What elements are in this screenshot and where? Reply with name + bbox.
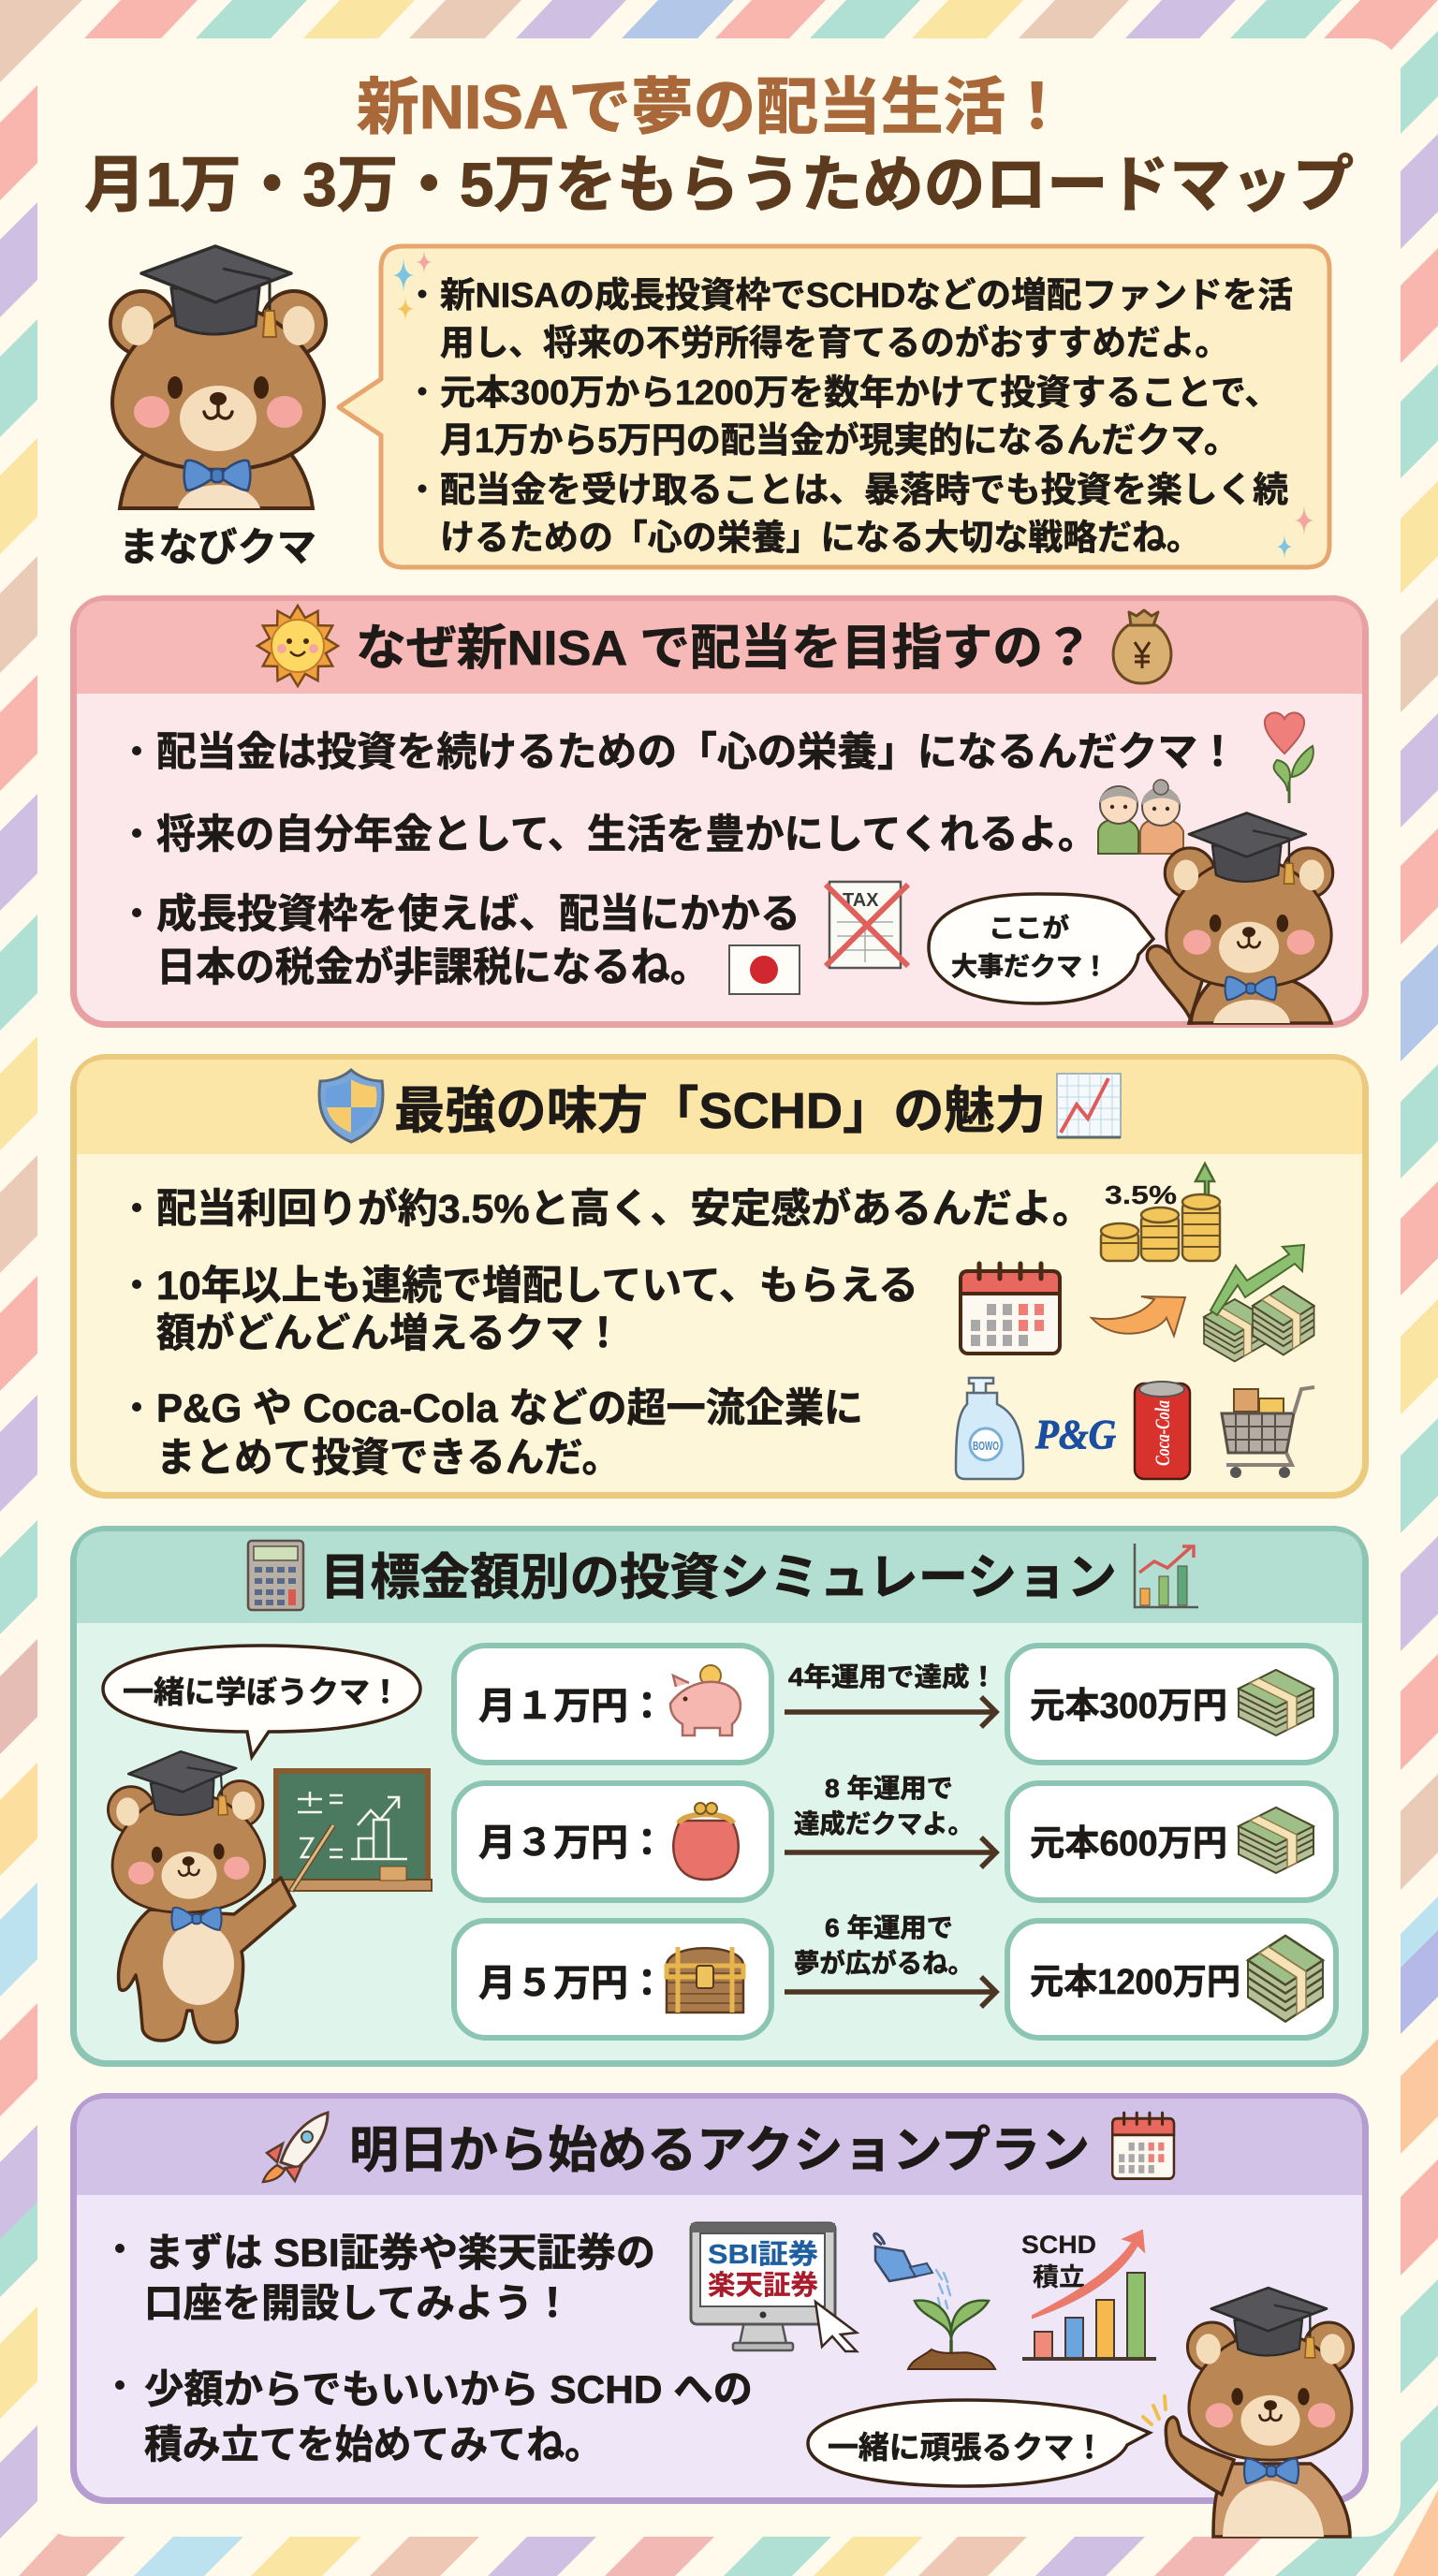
icon: coins with 3.5%	[1101, 1164, 1220, 1261]
icon: monitor with brokers: SBI証券	[708, 2239, 818, 2270]
bullet list	[132, 1187, 1093, 1481]
panel heading: なぜ新NISA で配当を目指すの？	[356, 622, 1093, 676]
icon: coin purse	[673, 1803, 739, 1880]
intro bullet list: 新NISAの成長投資枠でSCHDなどの増配ファンドを活	[440, 275, 1293, 315]
arrow with label: 4 years: 4年運用で達成！	[788, 1662, 997, 1691]
icon: treasure chest	[667, 1947, 743, 2012]
icon: money bag	[1113, 610, 1171, 683]
intro speech bubble	[339, 246, 1329, 567]
result: 3 million yen	[1007, 1646, 1336, 1763]
bullet list: 口座を開設してみよう！	[144, 2281, 572, 2325]
speech bubble	[103, 1646, 420, 1757]
icon: shield	[319, 1070, 383, 1142]
icon: cash stack	[1239, 1808, 1313, 1873]
result: 6 million yen: 元本600万円	[1030, 1824, 1227, 1864]
icon: crossed-out tax form: TAX	[843, 890, 879, 911]
panel header band	[77, 1531, 1362, 1623]
icon: cash stack	[1239, 1670, 1313, 1735]
intro bullet list	[418, 275, 1293, 557]
icon: bar and line chart	[1135, 1544, 1198, 1607]
row: 1 man yen	[454, 1646, 771, 1763]
bullet list: 積み立てを始めてみてね。	[144, 2422, 603, 2466]
icon: piggy bank	[670, 1665, 741, 1735]
intro bullet list: 月1万から5万円の配当金が現実的になるんだクマ。	[440, 420, 1239, 460]
icon: calendar	[961, 1264, 1060, 1354]
brand: P&G: P&G	[1034, 1412, 1116, 1457]
row: 3 man yen: 月３万円：	[478, 1822, 666, 1864]
bullet list: 額がどんどん増えるクマ！	[156, 1311, 623, 1356]
arrow with label: 6 years: 6 年運用で	[825, 1913, 953, 1942]
panel header band	[77, 601, 1362, 694]
intro bullet list: 用し、将来の不労所得を育てるのがおすすめだよ。	[440, 323, 1229, 362]
icon: detergent bottle	[956, 1378, 1023, 1479]
arrow with label: 8 years	[785, 1774, 996, 1867]
bullet list: 配当金は投資を続けるための「心の栄養」になるんだクマ！	[156, 730, 1238, 775]
icon: sparkles	[392, 249, 1314, 560]
bullet list: まとめて投資できるんだ。	[156, 1436, 621, 1481]
bullet list: 少額からでもいいから SCHD への	[144, 2367, 753, 2411]
icon: cursor	[815, 2302, 857, 2351]
icon: rising chart	[1057, 1074, 1121, 1137]
speech bubble: 大事だクマ！	[951, 952, 1108, 981]
title	[84, 72, 1354, 219]
intro bullet list: 元本300万から1200万を数年かけて投資することで、	[440, 373, 1280, 412]
icon: detergent bottle: BOWO	[973, 1439, 999, 1453]
panel header band	[77, 1060, 1362, 1154]
bullet list: 日本の税金が非課税になるね。	[156, 945, 710, 990]
bullet list	[115, 2231, 753, 2466]
intro bullet list: けるための「心の栄養」になる大切な戦略だね。	[440, 518, 1201, 557]
icon: blackboard	[272, 1771, 432, 1891]
row: 5 man yen: 月５万円：	[478, 1963, 666, 2004]
bullet list: 将来の自分年金として、生活を豊かにしてくれるよ。	[156, 812, 1097, 857]
arrow with label: 6 years: 夢が広がるね。	[794, 1948, 974, 1978]
icon: monitor with brokers	[691, 2223, 857, 2351]
icon: rocket	[263, 2113, 328, 2182]
panel: action plan	[70, 2093, 1369, 2537]
bullet list: 10年以上も連続で増配していて、もらえる	[156, 1264, 918, 1309]
panel header band	[77, 2099, 1362, 2195]
icon: coins with 3.5%: 3.5%	[1105, 1180, 1177, 1209]
arrow with label: 8 years: 達成だクマよ。	[794, 1809, 974, 1838]
icon: soda can	[1135, 1382, 1190, 1479]
bullet list: P&G や Coca-Cola などの超一流企業に	[156, 1386, 863, 1431]
panel: SCHD appeal	[70, 1054, 1369, 1499]
speech bubble	[808, 2400, 1150, 2486]
mascot: teacher bear	[105, 1748, 333, 2042]
icon: SCHD bar chart: 積立	[1033, 2263, 1085, 2291]
title: 新NISAで夢の配当生活！	[357, 72, 1068, 141]
icon: SCHD bar chart	[1021, 2231, 1156, 2359]
row: 1 man yen: 月１万円：	[478, 1686, 666, 1727]
intro bullet list: 配当金を受け取ることは、暴落時でも投資を楽しく続	[440, 470, 1288, 509]
mascot: thumbs-up bear	[1143, 2288, 1354, 2537]
result: 3 million yen: 元本300万円	[1030, 1687, 1227, 1726]
panel heading: 明日から始めるアクションプラン	[349, 2123, 1090, 2178]
bullet list: 配当利回りが約3.5%と高く、安定感があるんだよ。	[156, 1187, 1093, 1232]
result: 6 million yen	[1007, 1783, 1336, 1900]
speech bubble: 一緒に頑張るクマ！	[828, 2430, 1105, 2465]
row: 5 man yen	[454, 1921, 771, 2038]
icon: cash with growth arrow	[1204, 1245, 1314, 1361]
icon: elderly couple	[1098, 780, 1183, 854]
arrow with label: 8 years: 8 年運用で	[825, 1774, 953, 1803]
icon: crossed-out tax form	[826, 882, 908, 968]
title: 月1万・3万・5万をもらうためのロードマップ	[84, 150, 1354, 219]
row: 3 man yen	[454, 1783, 771, 1900]
result: 12 million yen: 元本1200万円	[1030, 1963, 1240, 2002]
result: 12 million yen	[1007, 1921, 1336, 2038]
panel: why NISA dividends	[70, 595, 1369, 1028]
arrow with label: 4 years	[785, 1662, 997, 1727]
icon: soda can: Coca-Cola	[1151, 1400, 1174, 1466]
icon: monitor with brokers: 楽天証券	[708, 2270, 818, 2301]
panel heading: 最強の味方「SCHD」の魅力	[394, 1083, 1046, 1139]
icon: tall cash stack	[1248, 1936, 1323, 2022]
icon: orange arrow	[1092, 1296, 1185, 1336]
icon: heart and sprout	[1265, 712, 1313, 803]
speech bubble: ここが	[989, 913, 1069, 943]
icon: sun	[257, 606, 338, 686]
panel: investment simulation	[70, 1526, 1369, 2067]
speech bubble: 一緒に学ぼうクマ！	[123, 1675, 401, 1709]
icon: calculator	[248, 1541, 303, 1610]
icon: calendar	[1112, 2113, 1174, 2179]
mascot: waving bear	[1147, 813, 1333, 1023]
panel heading: 目標金額別の投資シミュレーション	[320, 1550, 1117, 1605]
bullet list: 成長投資枠を使えば、配当にかかる	[156, 892, 800, 937]
bullet list: まずは SBI証券や楽天証券の	[144, 2231, 655, 2275]
icon: shopping cart	[1222, 1387, 1314, 1478]
mascot name: まなびクマ	[119, 525, 316, 569]
icon: SCHD bar chart: SCHD	[1021, 2231, 1096, 2259]
arrow with label: 6 years	[785, 1913, 996, 2007]
speech bubble	[929, 894, 1153, 1003]
mascot: graduate bear	[110, 246, 326, 508]
icon: japan flag	[729, 945, 800, 994]
bullet list	[132, 730, 1238, 990]
icon: watering can and sprout	[874, 2233, 995, 2369]
